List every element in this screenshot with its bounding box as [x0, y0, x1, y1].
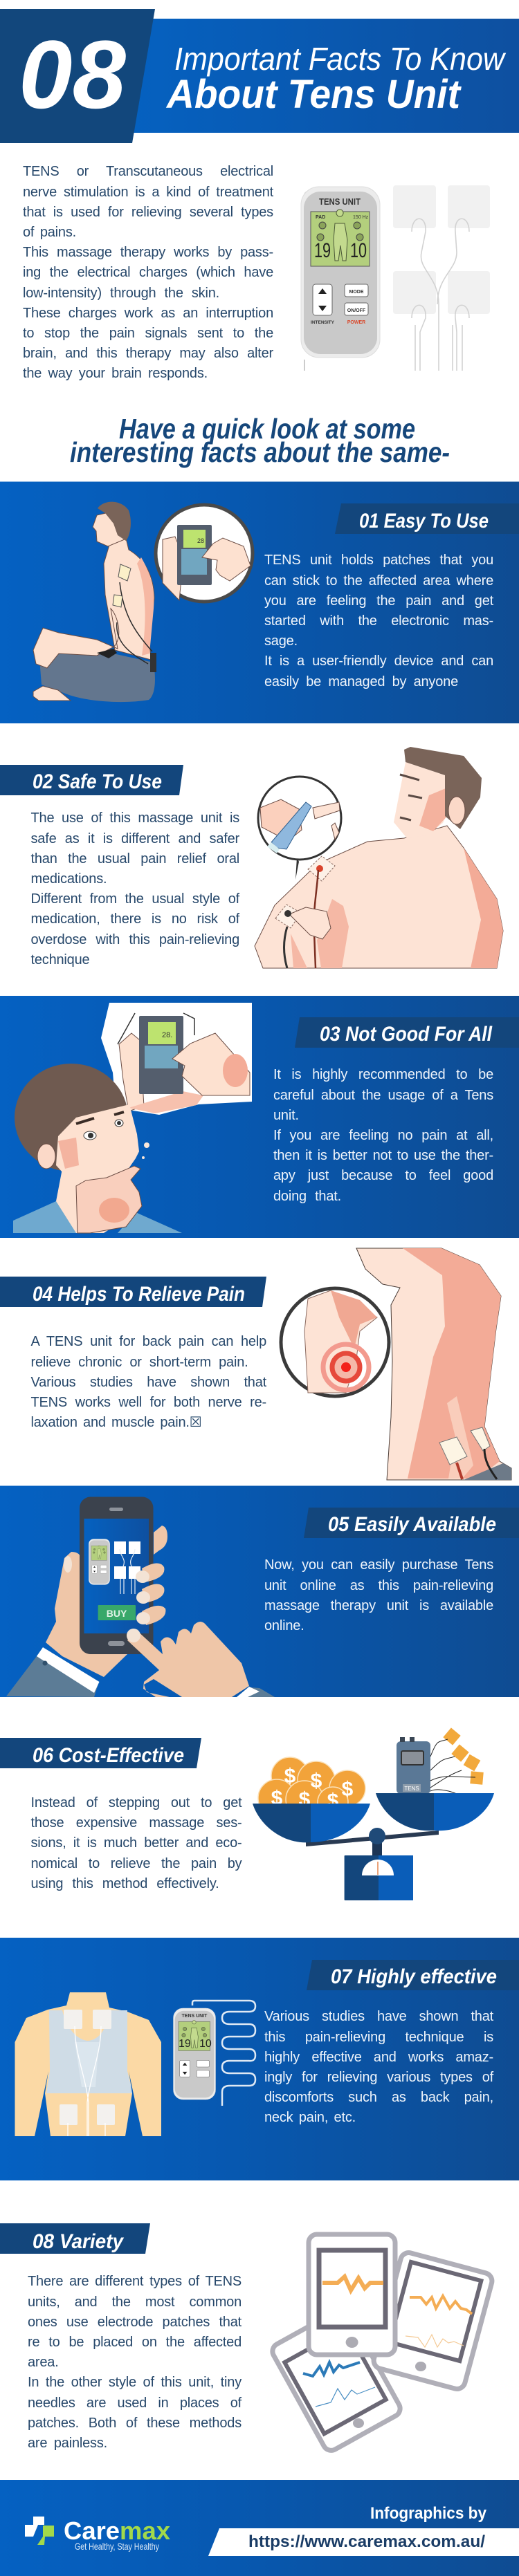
text: 07 body: highly effective and works amaz-	[264, 2050, 493, 2065]
text: 05 body: unit online as this pain-relieving	[264, 1578, 493, 1593]
text: intro: ing the electrical charges (which have	[23, 265, 273, 280]
label: 03	[295, 1017, 519, 1048]
text: 01 body: It is a user-friendly device and can	[264, 654, 493, 669]
label: 01	[335, 503, 519, 534]
text: 01 body: easily be managed by anyone	[264, 674, 458, 689]
text: 03 body: apy just because to feel good	[273, 1168, 493, 1183]
subheading	[70, 413, 450, 468]
text: 02 body: Different from the usual style of	[30, 891, 239, 907]
header number block	[0, 9, 155, 143]
text: intro: that is used for relieving several types	[23, 205, 273, 220]
text: 01 body: started with the electronic mas-	[264, 613, 493, 629]
footer band	[0, 2480, 519, 2576]
header number block: 08	[19, 20, 126, 129]
text: 01 body: you are feeling the pain and get	[264, 593, 493, 609]
text: 07 body: discomforts such as back pain,	[264, 2090, 493, 2105]
panel: 06 cost-effective	[0, 1727, 494, 1900]
icon: tens device with coiled wire: TENS UNIT	[182, 2014, 208, 2019]
logo: caremax	[25, 2517, 170, 2552]
illustration: balance scale with coins and device: $	[271, 1787, 283, 1810]
title	[165, 41, 507, 117]
text: intro: TENS or Transcutaneous electrical	[23, 164, 273, 179]
text: 08 body	[28, 2274, 242, 2451]
credit: https://www.caremax.com.au/	[248, 2532, 485, 2551]
text: 03 body: It is highly recommended to be	[273, 1067, 493, 1082]
label: 07	[307, 1960, 519, 1990]
text: 01 body	[264, 553, 494, 689]
text: intro	[23, 164, 274, 381]
text: 05 body: massage therapy unit is available	[264, 1598, 493, 1613]
illustration: three tablets with waveforms	[270, 2234, 494, 2454]
illustration: balance scale with coins and device: $	[327, 1790, 339, 1813]
text: 06 body: those expensive massage ses-	[30, 1815, 242, 1831]
text: 08 body: needles are used in places of	[28, 2396, 242, 2411]
illustration: device close-up circle: 28	[197, 537, 204, 544]
text: 08 body: ones use electrode patches that	[28, 2315, 242, 2330]
label: 08: 08 Variety	[33, 2230, 124, 2253]
text: 05 body: online.	[264, 1618, 304, 1633]
label: 06: 06 Cost-Effective	[33, 1744, 184, 1767]
label: 02: 02 Safe To Use	[33, 770, 162, 793]
text: 05 body: Now, you can easily purchase Tens	[264, 1557, 493, 1573]
title: About Tens Unit	[165, 72, 462, 117]
text: 08 body: area.	[28, 2355, 59, 2370]
illustration: pain close-up circle	[281, 1288, 389, 1396]
illustration: thinking boy	[13, 1064, 182, 1233]
icon: tens unit device with patches: INTENSITY	[311, 320, 335, 325]
illustration: balance scale with coins and device: TENS	[404, 1786, 419, 1792]
label: 06	[0, 1738, 201, 1768]
illustration: device close-up circle	[156, 505, 253, 602]
text: 08 body: There are different types of TENS	[28, 2274, 242, 2289]
text: 04 body	[30, 1334, 267, 1430]
panel: 03 not good for all	[0, 996, 519, 1238]
text: 01 body: can stick to the affected area where	[264, 573, 493, 589]
text: 07 body: Various studies have shown that	[264, 2009, 493, 2024]
panel: 08 variety	[0, 2223, 494, 2454]
text: 02 body: safe as it is different and safer	[30, 831, 239, 846]
credit: Infographics by	[370, 2504, 487, 2523]
icon: tens unit device with patches: 10	[350, 239, 367, 262]
icon: tens device with coiled wire: 19	[179, 2038, 191, 2050]
text: 03 body	[273, 1067, 493, 1204]
label: 03: 03 Not Good For All	[320, 1023, 493, 1046]
text: 06 body: sions, it is much better and eco-	[30, 1835, 242, 1851]
illustration: thought bubble with device	[101, 1003, 252, 1115]
text: 08 body: are painless.	[28, 2436, 107, 2451]
panel: 04 helps to relieve pain	[0, 1248, 511, 1480]
icon: tens unit device with patches: 150 Hz	[353, 215, 369, 220]
icon: tens device with coiled wire	[174, 2001, 255, 2106]
text: 06 body: using this method effectively.	[30, 1876, 219, 1891]
text: 06 body	[30, 1795, 242, 1891]
illustration: thought bubble with device: 28.	[162, 1031, 172, 1039]
text: 06 body: Instead of stepping out to get	[30, 1795, 242, 1810]
text: intro: the way your brain responds.	[23, 366, 208, 381]
text: 03 body: If you are feeling no pain at all,	[273, 1128, 493, 1143]
text: 04 body: laxation and muscle pain.☒	[30, 1415, 202, 1430]
text: 07 body: this pain-relieving technique is	[264, 2030, 493, 2045]
text: 04 body: TENS works well for both nerve re-	[30, 1395, 266, 1410]
text: 01 body: sage.	[264, 633, 298, 649]
text: 03 body: then it is better not to use the ther-	[273, 1148, 493, 1163]
text: 02 body: medications.	[30, 871, 107, 887]
illustration: man with patches	[255, 747, 503, 968]
text: 03 body: unit.	[273, 1108, 299, 1123]
logo: caremax: Caremax	[64, 2517, 170, 2545]
icon: tens unit device with patches: MODE	[349, 290, 364, 295]
text: 02 body	[30, 810, 239, 967]
illustration: hands holding phone: BUY	[107, 1608, 127, 1619]
text: 08 body: patches. Both of these methods	[28, 2416, 242, 2431]
subheading: Have a quick look at some	[119, 413, 415, 445]
label: 05	[304, 1508, 519, 1538]
credit	[208, 2504, 519, 2556]
panel: 05 easily available	[0, 1485, 519, 1697]
icon: tens unit device with patches: PAD	[316, 215, 325, 220]
label: 01: 01 Easy To Use	[359, 510, 489, 532]
icon: tens device with coiled wire: 10	[199, 2038, 212, 2050]
icon: tens unit device with patches: 19	[314, 239, 331, 262]
label: 02	[0, 765, 183, 795]
text: 03 body: careful about the usage of a Tens	[273, 1088, 493, 1103]
text: 02 body: than the usual pain relief oral	[30, 851, 239, 867]
header band	[132, 19, 519, 133]
text: intro: These charges work as an interruption	[23, 306, 273, 321]
text: 02 body: overdose with this pain-relieving	[30, 932, 239, 947]
panel: 07 highly effective	[0, 1938, 519, 2180]
illustration: balance scale with coins and device: $	[299, 1788, 311, 1811]
icon: tens unit device with patches: TENS UNIT	[319, 196, 361, 207]
text: 05 body	[264, 1557, 493, 1633]
icon: tens unit device with patches: POWER	[347, 320, 365, 325]
text: 06 body: nomical to relieve the pain by	[30, 1856, 242, 1871]
illustration: gel tube close-up circle	[258, 777, 341, 860]
title: Important Facts To Know	[174, 41, 507, 77]
text: intro: of pains.	[23, 225, 76, 240]
illustration: balance scale with coins and device: $	[284, 1765, 296, 1788]
text: 02 body: The use of this massage unit is	[30, 810, 239, 826]
label: 04	[0, 1277, 266, 1307]
subheading: interesting facts about the same-	[70, 436, 450, 468]
illustration: torso with electrode vest	[15, 1992, 161, 2136]
text: intro: low-intensity) through the skin.	[23, 286, 219, 301]
text: 04 body: A TENS unit for back pain can help	[30, 1334, 266, 1349]
text: 07 body	[264, 2009, 494, 2125]
icon: tens unit device with patches: ON/OFF	[347, 308, 366, 313]
illustration: balance scale with coins and device: $	[342, 1778, 354, 1801]
text: 08 body: units, and the most common	[28, 2295, 242, 2310]
text: 07 body: ingly for relieving various types of	[264, 2070, 493, 2085]
illustration: balance scale with coins and device: $	[311, 1770, 322, 1792]
text: intro: nerve stimulation is a kind of treatment	[23, 185, 273, 200]
text: 04 body: Various studies have shown that	[30, 1375, 266, 1390]
label: 07: 07 Highly effective	[331, 1965, 497, 1988]
icon: tens unit device with patches	[301, 185, 490, 371]
text: 01 body: TENS unit holds patches that you	[264, 553, 493, 568]
text: intro: to stop the pain signals sent to the	[23, 326, 273, 341]
label: 08	[0, 2223, 150, 2254]
text: 03 body: doing that.	[273, 1189, 341, 1204]
logo: caremax: Get Healthy, Stay Healthy	[75, 2541, 159, 2552]
illustration: man back with patches	[356, 1248, 511, 1480]
panel: 01 easy to use	[0, 481, 519, 723]
text: intro: brain, and this therapy may also alter	[23, 346, 273, 361]
text: 08 body: In the other style of this unit, tiny	[28, 2375, 242, 2390]
text: 08 body: re to be placed on the affected	[28, 2335, 242, 2350]
text: 04 body: relieve chronic or short-term pain.	[30, 1355, 248, 1370]
text: intro: This massage therapy works by pass-	[23, 245, 273, 260]
label: 05: 05 Easily Available	[328, 1513, 496, 1536]
panel: 02 safe to use	[0, 747, 503, 968]
text: 07 body: neck pain, etc.	[264, 2110, 356, 2125]
label: 04: 04 Helps To Relieve Pain	[33, 1283, 245, 1306]
illustration: balance scale with coins and device	[253, 1727, 494, 1900]
text: 02 body: medication, there is no risk of	[30, 911, 239, 927]
illustration: meditating man	[33, 502, 156, 702]
illustration: hands holding phone	[6, 1497, 275, 1697]
text: 02 body: technique	[30, 952, 89, 967]
